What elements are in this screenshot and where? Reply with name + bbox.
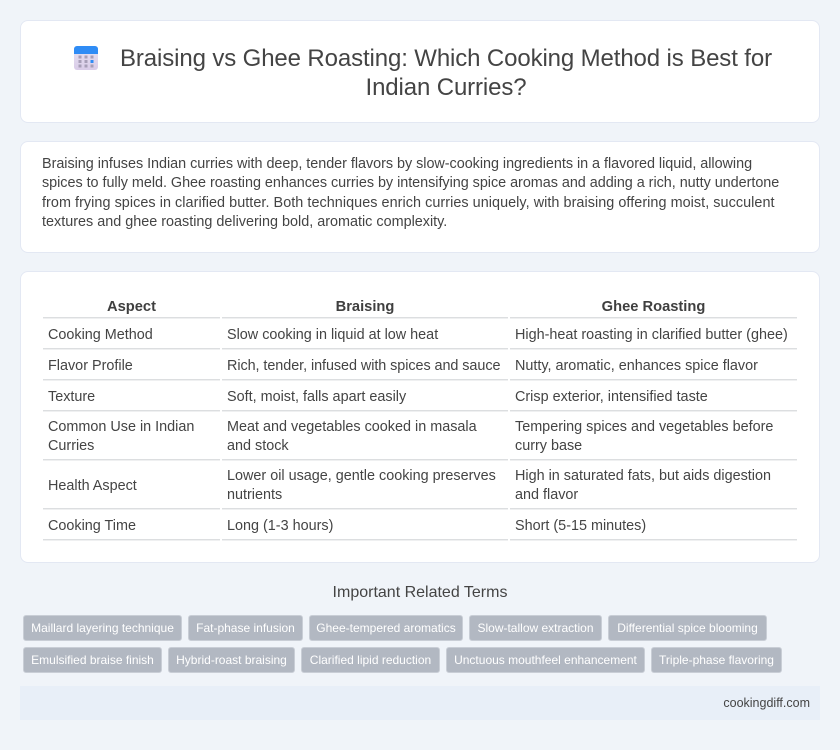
related term tags: Maillard layering technique <box>31 621 174 635</box>
row: health aspect: High in saturated fats, but aids digestion <box>515 468 771 484</box>
row: health aspect <box>43 468 797 510</box>
footer bar <box>20 686 820 720</box>
row: health aspect: Health Aspect <box>48 478 137 494</box>
row: health aspect: Lower oil usage, gentle cooking preserves <box>227 468 496 484</box>
related term tags <box>23 615 782 673</box>
intro paragraph: spices to fully meld. Ghee roasting enhances curries by intensifying spice aromas and adding a rich, nutty undertone <box>42 175 779 191</box>
row: flavor profile: Flavor Profile <box>48 358 133 374</box>
row: common use: Curries <box>48 438 94 454</box>
row: cooking time: Long (1-3 hours) <box>227 518 333 534</box>
related term tags: Hybrid-roast braising <box>176 653 287 667</box>
row: texture: Soft, moist, falls apart easily <box>227 389 406 405</box>
related term tags: Clarified lipid reduction <box>310 653 431 667</box>
table header <box>107 299 705 315</box>
related term tags: Ghee-tempered aromatics <box>316 621 456 635</box>
row: cooking method: High-heat roasting in clarified butter (ghee) <box>515 327 788 343</box>
row: common use: Meat and vegetables cooked in masala <box>227 419 477 435</box>
row: flavor profile: Rich, tender, infused with spices and sauce <box>227 358 500 374</box>
title: Braising vs Ghee Roasting: Which Cooking Method is Best for <box>120 45 772 72</box>
row: texture: Crisp exterior, intensified taste <box>515 389 708 405</box>
table rows <box>43 317 797 541</box>
title <box>120 45 772 101</box>
related term tags: Unctuous mouthfeel enhancement <box>454 653 637 667</box>
table header: Braising <box>336 299 394 315</box>
row: flavor profile: Nutty, aromatic, enhances spice flavor <box>515 358 758 374</box>
panel: intro text <box>20 141 820 253</box>
intro paragraph: textures and ghee roasting delivering bold, aromatic complexity. <box>42 214 447 230</box>
intro paragraph: from frying spices in clarified butter. Both techniques enrich curries uniquely, with braising offering moist, succulent <box>42 195 775 211</box>
panel: title card <box>20 20 820 123</box>
row: cooking time <box>43 518 797 541</box>
row: common use: curry base <box>515 438 582 454</box>
related term tags: Triple-phase flavoring <box>659 653 774 667</box>
related term tags: Slow-tallow extraction <box>477 621 594 635</box>
row: health aspect: and flavor <box>515 487 578 503</box>
related term tags: Fat-phase infusion <box>196 621 295 635</box>
heading: related terms: Important Related Terms <box>333 584 507 601</box>
row: cooking method: Cooking Method <box>48 327 153 343</box>
related term tags: Differential spice blooming <box>617 621 758 635</box>
related term tags: Emulsified braise finish <box>31 653 154 667</box>
row: common use: Common Use in Indian <box>48 419 194 435</box>
row: cooking method <box>43 327 797 350</box>
row: texture <box>43 389 797 412</box>
footer source: cookingdiff.com <box>723 696 810 710</box>
intro paragraph: Braising infuses Indian curries with deep, tender flavors by slow-cooking ingredients in a flavored liquid, allowing <box>42 156 752 172</box>
row: flavor profile <box>43 358 797 381</box>
row: texture: Texture <box>48 389 95 405</box>
row: cooking method: Slow cooking in liquid at low heat <box>227 327 438 343</box>
row: cooking time: Short (5-15 minutes) <box>515 518 646 534</box>
row: common use: Tempering spices and vegetables before <box>515 419 773 435</box>
table header: Aspect <box>107 299 156 315</box>
row: health aspect: nutrients <box>227 487 282 503</box>
row: common use <box>43 419 797 461</box>
panel: comparison table <box>20 271 820 563</box>
table header: Ghee Roasting <box>602 299 705 315</box>
icon: calendar <box>74 46 98 70</box>
row: common use: and stock <box>227 438 289 454</box>
intro paragraph <box>42 156 779 230</box>
title: Indian Curries? <box>366 74 526 101</box>
row: cooking time: Cooking Time <box>48 518 136 534</box>
